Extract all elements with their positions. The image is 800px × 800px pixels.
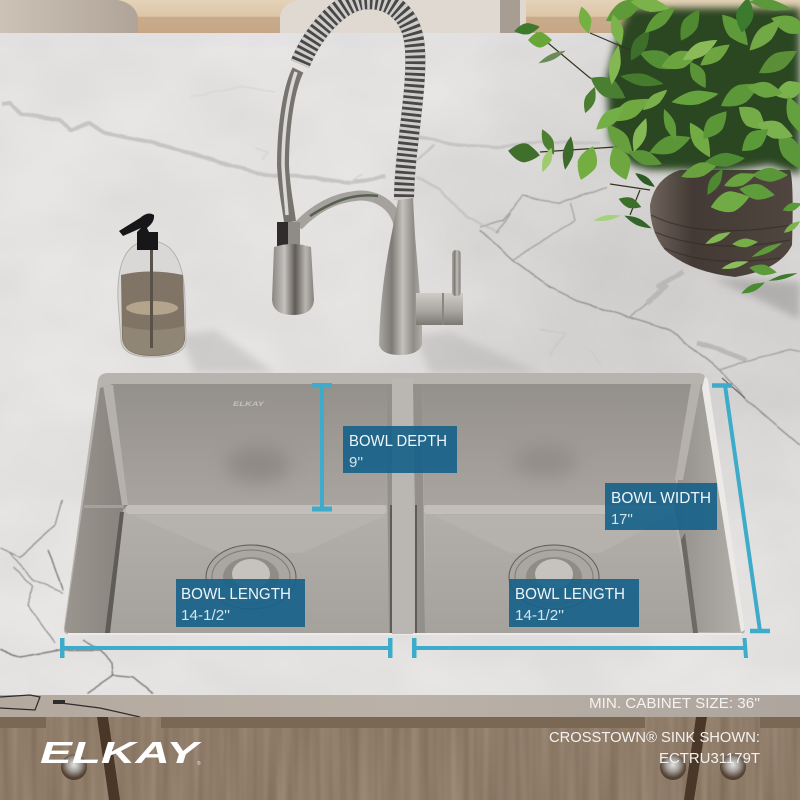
left drain xyxy=(206,545,296,609)
left bowl left wall xyxy=(65,384,128,633)
dark foliage mass xyxy=(606,8,800,175)
plant shadow xyxy=(712,278,800,320)
faucet lever xyxy=(452,250,461,296)
arched spout xyxy=(298,196,399,228)
dimension line: bowl depth xyxy=(312,383,332,512)
left bowl floor xyxy=(108,513,392,633)
plant xyxy=(507,0,800,297)
spray head xyxy=(277,222,300,246)
right bowl back wall xyxy=(422,384,693,505)
left bowl right groove xyxy=(386,384,392,633)
dark marble veins xyxy=(0,187,800,693)
label: bowl depth: BOWL DEPTH xyxy=(349,433,447,450)
faucet xyxy=(272,0,463,355)
label: right bowl length: 14-1/2'' xyxy=(515,607,564,624)
sink xyxy=(64,373,745,635)
soap liquid xyxy=(121,272,185,356)
label: bowl depth xyxy=(343,426,457,473)
back layer leaves xyxy=(601,0,800,183)
dimension line: bowl width xyxy=(712,385,770,631)
sink rim xyxy=(64,373,745,634)
label: bowl width: BOWL WIDTH xyxy=(611,490,711,507)
label: right bowl length: BOWL LENGTH xyxy=(515,586,625,603)
right bowl drain reflection xyxy=(513,446,577,478)
soap pump xyxy=(119,214,158,250)
right bowl floor xyxy=(425,513,698,633)
left floor dark edge xyxy=(105,512,124,633)
left bowl back wall xyxy=(113,384,387,505)
faucet body xyxy=(379,198,422,355)
label: left bowl length xyxy=(176,579,305,627)
dimension line: left bowl length xyxy=(60,638,392,658)
door gaps xyxy=(97,717,707,800)
text: minimum cabinet size: MIN. CABINET SIZE: 36'' xyxy=(589,696,760,712)
brand logo: Elkay: ® xyxy=(197,760,201,767)
label: left bowl length: BOWL LENGTH xyxy=(181,586,291,603)
brand logo: Elkay: ELKAY xyxy=(40,735,203,770)
pull-down tube xyxy=(283,70,298,222)
right bowl right wall xyxy=(674,384,740,632)
dimension line: right bowl length xyxy=(412,638,748,658)
stems xyxy=(536,33,650,215)
text: sink model shown: CROSSTOWN® SINK SHOWN: xyxy=(549,730,760,746)
soap dispenser xyxy=(118,214,186,357)
right drain xyxy=(509,545,599,609)
background: chairs and wooden table behind counter xyxy=(0,0,800,34)
label: bowl depth: 9'' xyxy=(349,454,363,471)
countertop edge band xyxy=(0,695,800,717)
faucet handle xyxy=(416,293,463,325)
left bowl drain reflection xyxy=(226,447,290,483)
sink bottom edge highlight xyxy=(68,633,742,635)
label: right bowl length xyxy=(509,579,639,627)
wooden cabinet xyxy=(0,717,800,800)
counter shadows xyxy=(180,330,540,373)
label: left bowl length: 14-1/2'' xyxy=(181,607,230,624)
cabinet knobs xyxy=(61,754,746,780)
center divider xyxy=(392,378,413,634)
label: bowl width xyxy=(605,483,717,530)
right bowl left groove xyxy=(413,384,425,633)
text: sink model shown xyxy=(549,730,760,767)
front layer leaves xyxy=(507,0,800,297)
text: sink model shown: ECTRU31179T xyxy=(659,751,760,767)
soft grey marble veins xyxy=(2,86,747,365)
spring coil xyxy=(300,0,415,200)
cabinet rails xyxy=(0,717,800,728)
label: bowl width: 17'' xyxy=(611,511,633,528)
brand logo: Elkay xyxy=(40,735,203,770)
pot xyxy=(650,170,793,277)
small back wall logo: ELKAY xyxy=(233,402,266,408)
